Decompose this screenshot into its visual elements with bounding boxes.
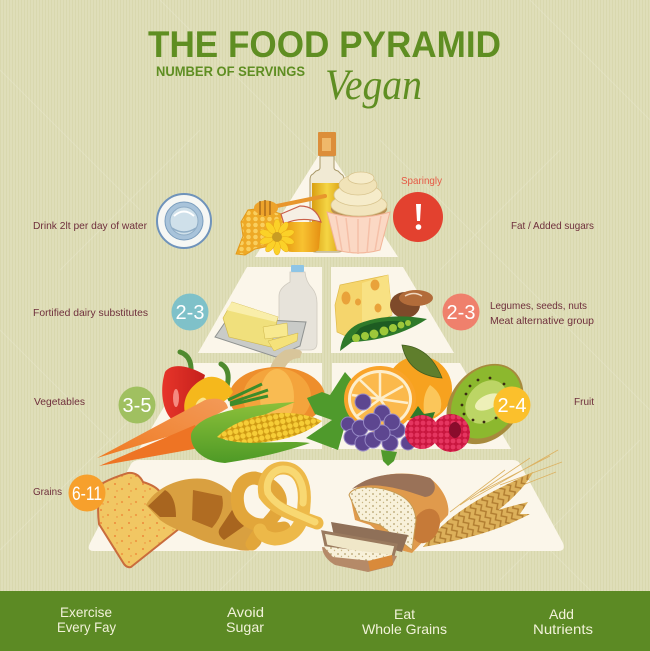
serving badge: 3-5: [118, 386, 156, 424]
serving badge: 2-4: 2-4: [498, 395, 526, 417]
food: whole orange: [386, 356, 452, 422]
serving badge: 2-3 teal: 2-3: [176, 302, 204, 324]
label: sparingly: Sparingly: [401, 175, 443, 187]
serving badge: 2-4: [494, 386, 530, 424]
title: THE FOOD PYRAMID: [148, 24, 501, 65]
serving badge: 3-5: 3-5: [123, 395, 151, 417]
footer item: grains: [362, 606, 447, 637]
label: grains: Grains: [33, 486, 62, 498]
footer item: nutrients: Nutrients: [533, 621, 593, 637]
footer item: nutrients: Add: [549, 606, 574, 622]
food: green leaves: [306, 372, 370, 450]
food: yellow flower: [259, 219, 295, 255]
food: citrus leaf: [402, 345, 442, 378]
food: corn: [191, 402, 322, 463]
footer item: sugar: Avoid: [227, 604, 264, 620]
pyramid tiers: [89, 145, 564, 551]
food: kiwi: [431, 348, 539, 460]
footer item: nutrients: [533, 606, 593, 637]
serving badge: 2-3 salmon: [442, 294, 480, 330]
label: fruit: Fruit: [574, 396, 594, 408]
label: legumes: Meat alternative group: [490, 315, 594, 327]
footer item: exercise: [57, 604, 116, 635]
label: vegetables: Vegetables: [34, 396, 85, 408]
footer item: sugar: [226, 604, 264, 635]
food: red pepper: [162, 352, 205, 422]
food: grape leaf small: [381, 450, 397, 466]
food: bread slices: [322, 522, 408, 572]
vegan handwritten heading: Vegan: [325, 62, 422, 109]
food: bread loaf: [349, 473, 448, 553]
serving badge: 6-11: [68, 474, 106, 512]
label: dairy: Fortified dairy substitutes: [33, 307, 148, 319]
food: cheese: [335, 275, 392, 338]
food: pea pod: [340, 316, 427, 351]
food: raspberries: [405, 406, 470, 452]
food: wheat: [423, 450, 562, 547]
label: water: Drink 2lt per day of water: [33, 220, 147, 232]
footer item: exercise: Every Fay: [57, 619, 116, 635]
label: fat: Fat / Added sugars: [511, 220, 594, 232]
food: beans: [390, 290, 433, 318]
food: yellow pepper: [184, 364, 233, 417]
food: butter on tray: [215, 302, 306, 357]
food: carrots: [97, 384, 268, 466]
footer band: [0, 591, 650, 651]
food: pumpkin: [229, 349, 325, 427]
food: milk jug: [279, 265, 317, 350]
food: honey jar: [254, 196, 325, 252]
icon: sparingly alert: [393, 192, 443, 242]
icon: water plate: [157, 194, 211, 248]
subtitle: NUMBER OF SERVINGS: [156, 64, 305, 79]
footer item: grains: Eat: [394, 606, 415, 622]
label: legumes: [490, 300, 594, 327]
food: honeycomb: [236, 208, 284, 255]
footer item: grains: Whole Grains: [362, 621, 447, 637]
food: oil bottle: [310, 132, 344, 252]
food: croissant: [146, 479, 262, 551]
serving badge: 6-11: 6-11: [72, 484, 102, 505]
food: cupcake: [327, 172, 390, 254]
food: grapes: [341, 394, 415, 451]
serving badge: 2-3 teal: [172, 294, 208, 330]
food: pretzel: [237, 468, 317, 544]
serving badge: 2-3 salmon: 2-3: [447, 302, 475, 324]
footer item: sugar: Sugar: [226, 619, 264, 635]
food: toast: [98, 473, 180, 567]
label: legumes: Legumes, seeds, nuts: [490, 300, 587, 312]
food: orange slice: [344, 366, 416, 432]
footer item: exercise: Exercise: [60, 604, 112, 620]
